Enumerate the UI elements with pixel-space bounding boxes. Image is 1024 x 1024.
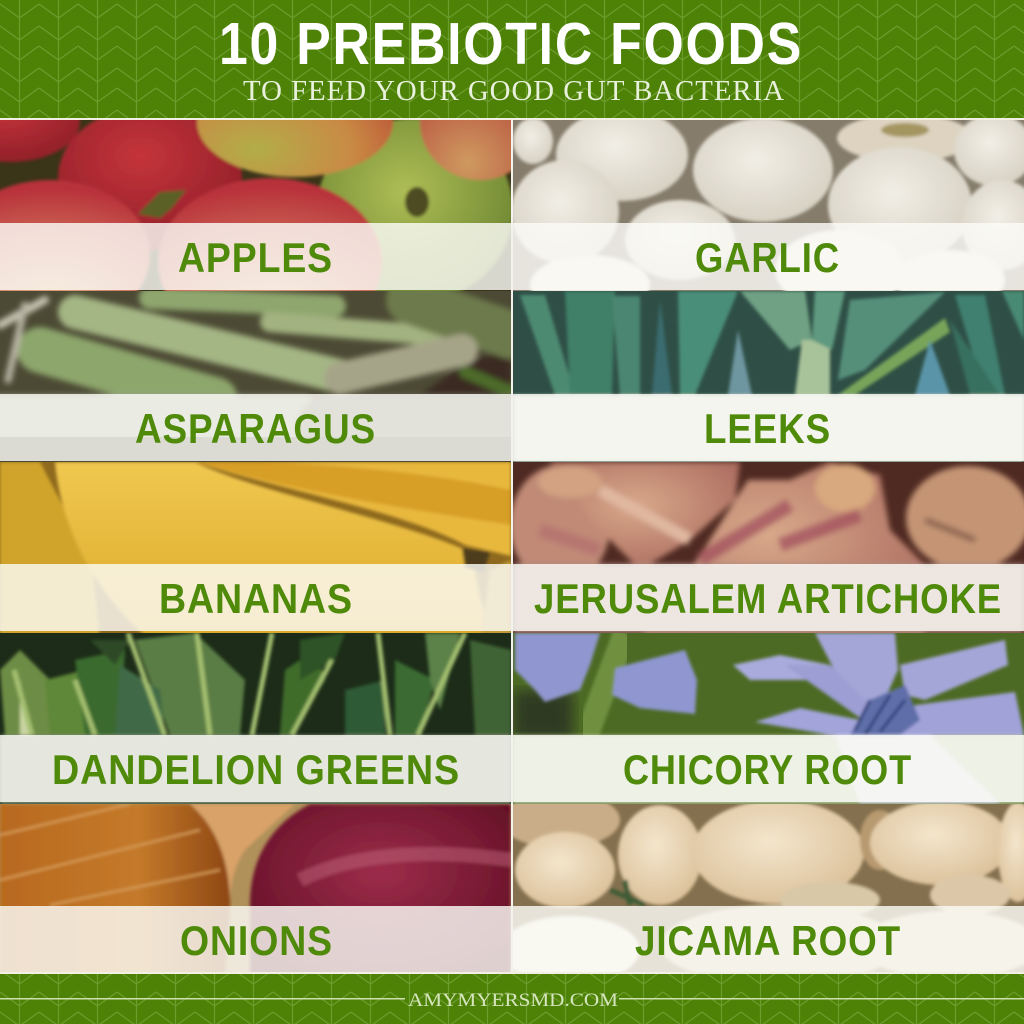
jicama photo	[513, 804, 1024, 972]
label: jicama root: JICAMA ROOT	[635, 917, 901, 964]
label: chicory root	[513, 735, 1024, 802]
onion photo	[0, 804, 511, 975]
panel: Jerusalem artichoke	[510, 462, 1024, 640]
panel: leeks	[513, 291, 1024, 462]
label: apples	[0, 223, 511, 290]
title: 10 PREBIOTIC FOODS	[219, 11, 803, 77]
dandelion photo	[0, 633, 511, 804]
header banner	[0, 0, 1024, 118]
label: Jerusalem artichoke	[513, 564, 1024, 631]
footer website: AMYMYERSMD.COM	[408, 990, 618, 1011]
label: asparagus	[0, 394, 511, 461]
label: dandelion greens	[0, 735, 511, 802]
asparagus photo	[0, 298, 511, 430]
label: garlic: GARLIC	[695, 234, 840, 281]
label: leeks: LEEKS	[704, 405, 831, 452]
label: garlic	[513, 223, 1024, 290]
panel: asparagus	[0, 291, 511, 462]
chicory photo	[513, 633, 1024, 804]
label: onions: ONIONS	[180, 917, 333, 964]
panel: jicama root	[513, 804, 1024, 972]
label: bananas	[0, 564, 511, 631]
artichoke photo	[510, 462, 1024, 640]
garlic photo	[513, 120, 1024, 291]
center divider	[511, 120, 513, 974]
label: asparagus: ASPARAGUS	[135, 405, 376, 452]
footer banner	[0, 972, 1024, 1024]
apple photo	[0, 120, 511, 291]
banana photo	[0, 462, 511, 640]
label: leeks	[513, 394, 1024, 461]
panel: onions	[0, 804, 511, 975]
leek photo	[513, 291, 1024, 462]
label: chicory root: CHICORY ROOT	[623, 746, 912, 793]
label: jicama root	[513, 906, 1024, 973]
header rule	[0, 118, 1024, 120]
label: apples: APPLES	[178, 234, 333, 281]
panel: apples	[0, 120, 511, 291]
label: onions	[0, 906, 511, 973]
subtitle: TO FEED YOUR GOOD GUT BACTERIA	[243, 75, 785, 107]
label: bananas: BANANAS	[159, 575, 353, 622]
panel: dandelion greens	[0, 633, 511, 804]
panel: garlic	[513, 120, 1024, 291]
panel: chicory root	[513, 633, 1024, 804]
label: dandelion greens: DANDELION GREENS	[52, 746, 460, 793]
panel: bananas	[0, 462, 511, 640]
